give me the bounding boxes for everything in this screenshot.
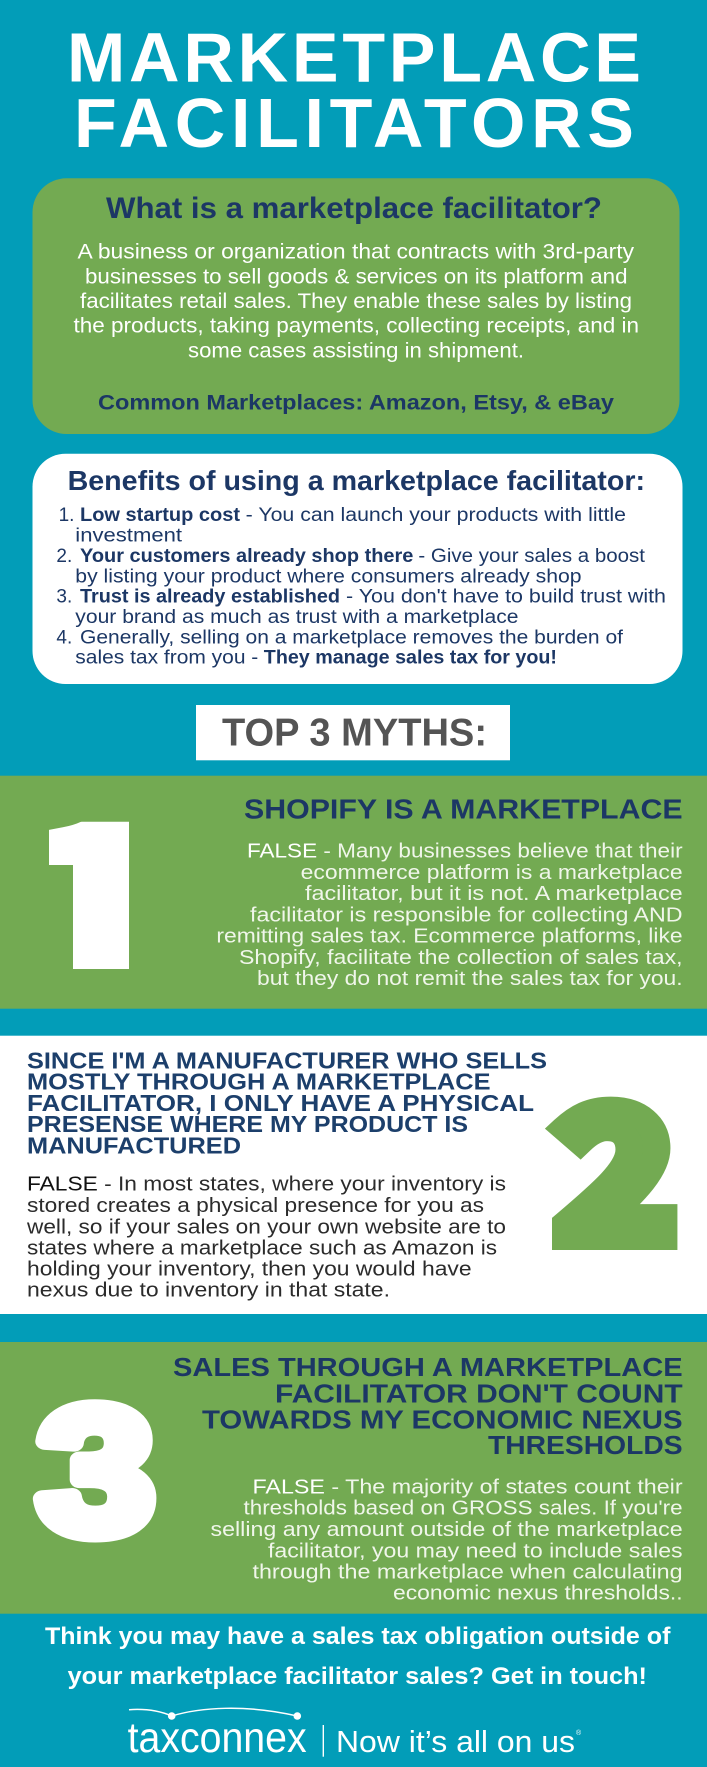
myth 2 body: stored creates a physical presence for you as bbox=[27, 1195, 484, 1217]
logo: taxconnex bbox=[128, 1708, 582, 1762]
myth 3 body: through the marketplace when calculating bbox=[252, 1562, 683, 1584]
myth 2 body: holding your inventory, then you would have bbox=[27, 1259, 472, 1281]
logo: taxconnex: ® bbox=[576, 1729, 582, 1737]
benefits numbered list: - Give your sales a boost bbox=[418, 546, 646, 567]
benefits numbered list: Generally, selling on a marketplace removes the burden of bbox=[80, 627, 624, 648]
myth 1 body: Shopify, facilitate the collection of sales tax, bbox=[239, 947, 683, 969]
myth 2 heading: FACILITATOR, I ONLY HAVE A PHYSICAL bbox=[27, 1090, 534, 1116]
myth 2 body: well, so if your sales on your own website are to bbox=[26, 1216, 506, 1238]
logo arc with dots bbox=[129, 1708, 301, 1720]
benefits numbered list: investment bbox=[75, 525, 183, 546]
myth 1 body: but they do not remit the sales tax for you. bbox=[257, 968, 683, 990]
myth 2 body: states where a marketplace such as Amazon is bbox=[27, 1237, 497, 1259]
myth 1 body: facilitator, but it is not. A marketplace bbox=[305, 883, 683, 905]
call to action: your marketplace facilitator sales? Get in touch! bbox=[68, 1663, 647, 1690]
myth 1 body: ecommerce platform is a marketplace bbox=[301, 862, 683, 884]
benefits numbered list: Trust is already established bbox=[80, 587, 340, 608]
myth 2 heading: SINCE I'M A MANUFACTURER WHO SELLS bbox=[27, 1047, 547, 1073]
definition text bbox=[74, 239, 639, 362]
title: FACILITATORS bbox=[74, 84, 634, 162]
benefits numbered list: by listing your product where consumers already shop bbox=[75, 566, 582, 587]
myth 2 body: nexus due to inventory in that state. bbox=[27, 1280, 390, 1302]
myth 2 heading: PRESENSE WHERE MY PRODUCT IS bbox=[27, 1111, 468, 1137]
title: MARKETPLACE bbox=[67, 19, 641, 97]
benefits numbered list: Low startup cost bbox=[80, 505, 241, 526]
benefits numbered list: Your customers already shop there bbox=[80, 546, 413, 567]
number 3: 3 bbox=[38, 1371, 154, 1570]
myth 1 heading: SHOPIFY IS A MARKETPLACE bbox=[244, 793, 683, 824]
myth 3 heading: THRESHOLDS bbox=[488, 1432, 683, 1460]
myth 2 heading bbox=[27, 1047, 547, 1158]
benefits numbered list: They manage sales tax for you! bbox=[264, 648, 557, 669]
myth 3 body: thresholds based on GROSS sales. If you're bbox=[244, 1498, 683, 1520]
myth 3 heading: TOWARDS MY ECONOMIC NEXUS bbox=[202, 1406, 683, 1434]
myth 1 body: FALSE - Many businesses believe that their bbox=[247, 841, 683, 863]
myth 2 body bbox=[26, 1174, 506, 1302]
myth 3 heading: SALES THROUGH A MARKETPLACE bbox=[173, 1354, 683, 1382]
heading: what is a marketplace facilitator: What is a marketplace facilitator? bbox=[106, 192, 602, 225]
definition text: the products, taking payments, collecting receipts, and in bbox=[74, 314, 639, 338]
heading: top 3 myths: TOP 3 MYTHS: bbox=[222, 712, 487, 755]
benefits numbered list bbox=[56, 505, 666, 669]
common marketplaces line: Common Marketplaces: Amazon, Etsy, & eBay bbox=[98, 390, 614, 414]
definition text: some cases assisting in shipment. bbox=[188, 338, 524, 362]
benefits numbered list: 4. bbox=[56, 627, 72, 648]
definition text: A business or organization that contracts with 3rd-party bbox=[78, 239, 634, 263]
myth 3 heading bbox=[173, 1354, 683, 1460]
myth 3 body: facilitator, you may need to include sales bbox=[268, 1540, 683, 1562]
heading: top 3 myths bbox=[196, 705, 510, 760]
panel: myth 1 bbox=[0, 760, 707, 1009]
benefits numbered list: 3. bbox=[56, 587, 72, 608]
myth 2 heading: MANUFACTURED bbox=[27, 1132, 241, 1158]
panel: benefits bbox=[32, 454, 682, 684]
myth 2 heading: MOSTLY THROUGH A MARKETPLACE bbox=[27, 1069, 490, 1095]
call to action bbox=[45, 1623, 671, 1690]
call to action: Think you may have a sales tax obligation outside of bbox=[45, 1623, 671, 1650]
panel: myth 3 bbox=[0, 1342, 707, 1614]
myth 3 body: FALSE - The majority of states count their bbox=[252, 1476, 683, 1498]
number 1: 1 bbox=[48, 760, 148, 1006]
myth 1 body: facilitator is responsible for collecting AND bbox=[250, 904, 683, 926]
benefits numbered list: 2. bbox=[56, 546, 72, 567]
definition text: facilitates retail sales. They enable these sales by listing bbox=[80, 289, 632, 313]
benefits numbered list: - You can launch your products with little bbox=[246, 505, 626, 526]
myth 3 heading: FACILITATOR DON'T COUNT bbox=[275, 1380, 683, 1408]
myth 3 body: economic nexus thresholds.. bbox=[393, 1583, 683, 1605]
benefits numbered list: 1. bbox=[59, 505, 74, 526]
benefits numbered list: - You don't have to build trust with bbox=[346, 587, 666, 608]
benefits numbered list: sales tax from you - bbox=[75, 648, 258, 669]
heading: benefits: Benefits of using a marketplace facilitator: bbox=[68, 465, 645, 496]
number 2: 2 bbox=[557, 1034, 674, 1289]
benefits numbered list: your brand as much as trust with a marketplace bbox=[75, 607, 519, 628]
myth 1 body bbox=[216, 841, 683, 990]
logo wordmark: taxconnex bbox=[128, 1714, 307, 1762]
title bbox=[67, 19, 641, 162]
panel: myth 2 bbox=[0, 1034, 707, 1314]
panel: what is a marketplace facilitator bbox=[32, 178, 680, 434]
myth 2 body: FALSE - In most states, where your inventory is bbox=[27, 1174, 506, 1196]
definition text: businesses to sell goods & services on its platform and bbox=[85, 264, 628, 288]
myth 3 body: selling any amount outside of the marketplace bbox=[210, 1519, 683, 1541]
logo tagline: Now it’s all on us bbox=[336, 1724, 575, 1759]
myth 3 body bbox=[210, 1476, 683, 1605]
myth 1 body: remitting sales tax. Ecommerce platforms, like bbox=[216, 926, 683, 948]
